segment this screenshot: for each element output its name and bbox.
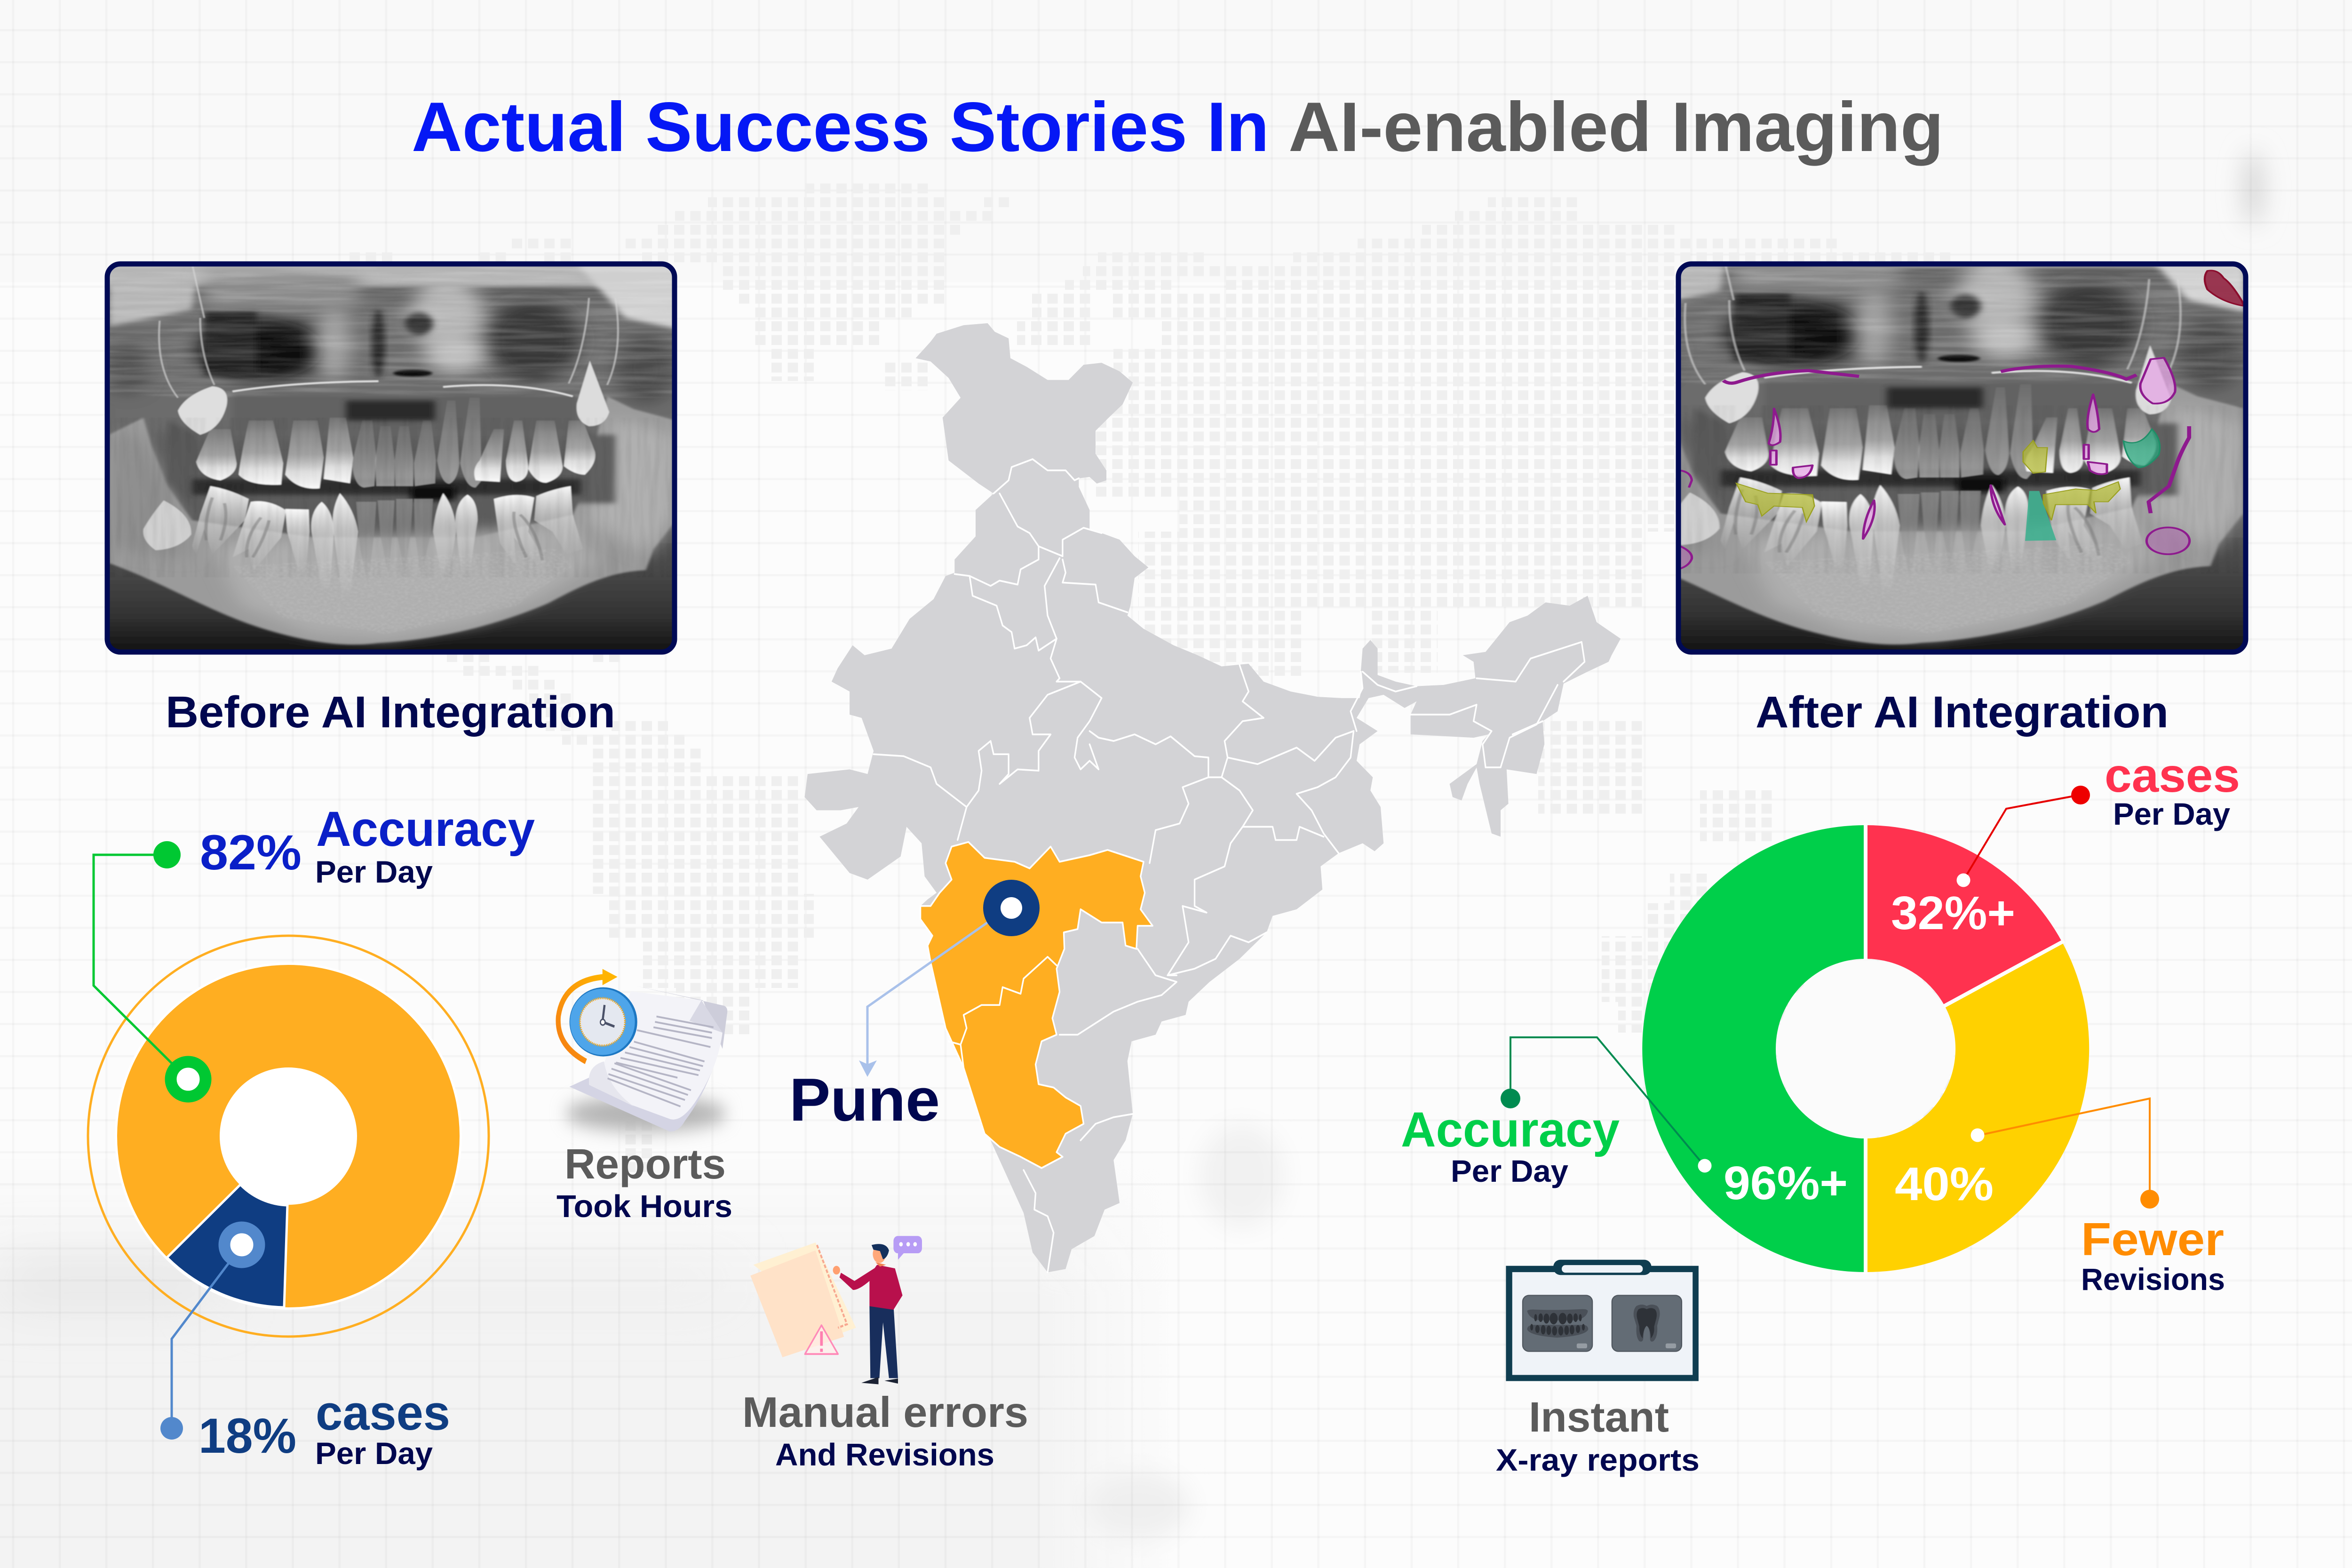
legend: 82% accuracy per day: 82% [200, 825, 302, 880]
title [412, 88, 1944, 166]
map of India [804, 323, 1621, 1272]
legend: accuracy per day [1401, 1102, 1620, 1188]
after donut chart [1501, 786, 2159, 1274]
label: instant x-ray reports [1496, 1394, 1700, 1477]
legend: cases per day [2105, 748, 2240, 831]
dotted world map [350, 181, 1955, 1176]
x-ray: after AI integration with annotations [1676, 262, 2249, 655]
legend: 18% cases per day: 18% [199, 1409, 296, 1464]
label: Pune: Pune [789, 1066, 940, 1134]
label: manual errors and revisions: Manual errors [742, 1389, 1028, 1436]
label: manual errors and revisions [742, 1389, 1028, 1472]
legend: fewer revisions [2081, 1213, 2225, 1297]
x-ray: before AI integration [104, 262, 677, 655]
legend: 82% accuracy per day [200, 802, 535, 889]
label: instant x-ray reports: Instant [1529, 1394, 1669, 1441]
highlighted region: Maharashtra and Karnataka [921, 842, 1152, 1168]
legend: 82% accuracy per day: Accuracy [316, 802, 535, 857]
legend: fewer revisions: Fewer [2081, 1213, 2224, 1265]
icon: x-ray clipboard [1506, 1260, 1699, 1381]
legend: accuracy per day: Accuracy [1401, 1102, 1620, 1157]
icon: man reviewing papers with warning [750, 1236, 922, 1384]
after donut chart: 40% [1895, 1158, 1994, 1210]
legend: accuracy per day: Per Day [1451, 1154, 1568, 1188]
title: Actual Success Stories In [412, 88, 1269, 166]
label: reports took hours: Took Hours [556, 1189, 732, 1224]
legend: cases per day: cases [2105, 748, 2240, 802]
pin and pointer to Pune [859, 880, 1040, 1077]
title: AI-enabled Imaging [1288, 88, 1944, 166]
before donut chart [88, 841, 489, 1440]
legend: cases per day: Per Day [2113, 796, 2230, 831]
after donut chart: 96%+ [1724, 1157, 1848, 1210]
heading: before AI integration: Before AI Integration [166, 687, 615, 737]
legend: fewer revisions: Revisions [2081, 1262, 2225, 1297]
heading: after AI integration: After AI Integration [1756, 687, 2169, 737]
icon: report document with clock [558, 969, 727, 1131]
label: reports took hours [556, 1141, 732, 1224]
legend: 18% cases per day [199, 1385, 450, 1471]
legend: 18% cases per day: cases [316, 1385, 450, 1441]
legend: 18% cases per day: Per Day [315, 1436, 433, 1471]
label: instant x-ray reports: X-ray reports [1496, 1442, 1700, 1477]
label: manual errors and revisions: And Revisions [775, 1437, 994, 1472]
legend: 82% accuracy per day: Per Day [315, 854, 433, 889]
label: reports took hours: Reports [564, 1141, 726, 1188]
after donut chart: 32%+ [1891, 887, 2015, 939]
